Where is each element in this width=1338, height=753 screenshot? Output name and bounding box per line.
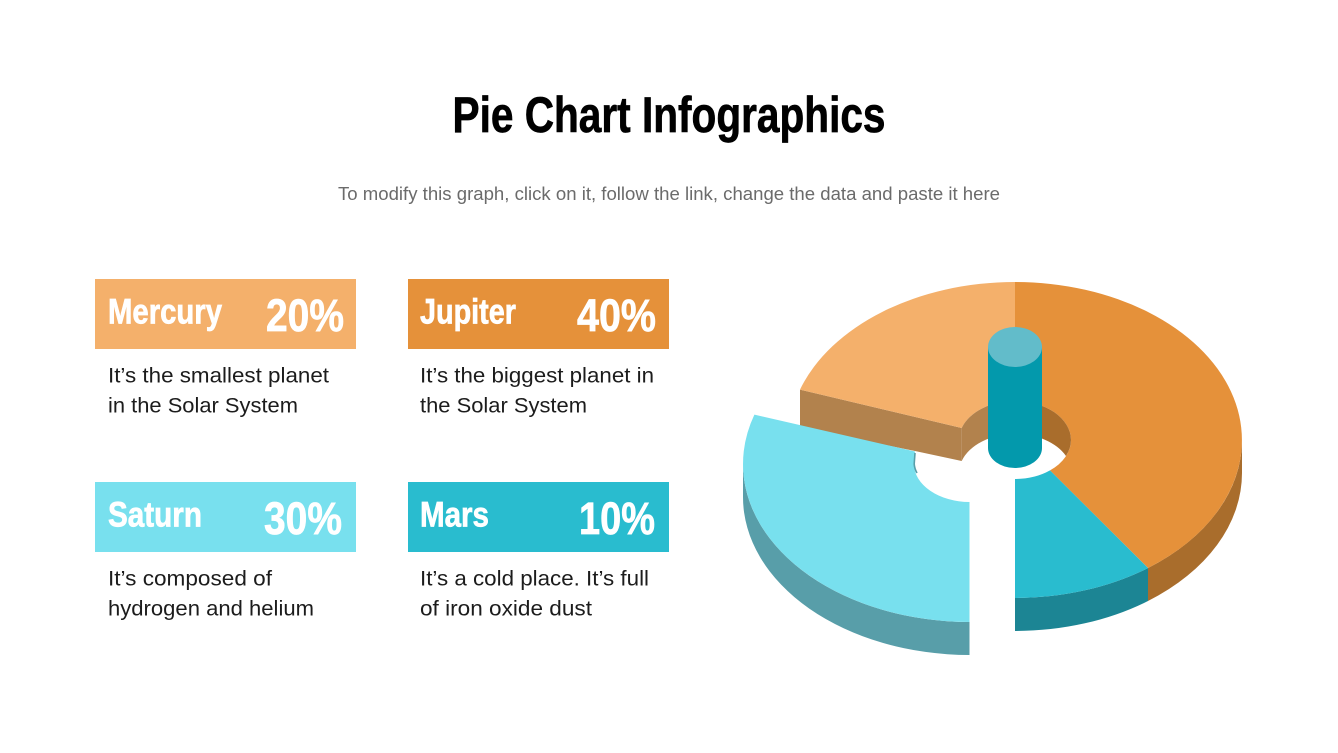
- Jupiter description: the Solar System: [420, 394, 587, 418]
- Jupiter percentage: 40%: [577, 290, 656, 341]
- Mercury description: in the Solar System: [108, 394, 298, 418]
- Mercury description: It’s the smallest planet: [108, 364, 329, 388]
- Saturn slice top: [743, 415, 970, 622]
- cylinder body: [988, 347, 1042, 468]
- Mars name: Mars: [420, 496, 489, 534]
- Jupiter description: [420, 364, 654, 418]
- Mercury percentage: 20%: [266, 290, 344, 341]
- Saturn header bar: [95, 482, 356, 552]
- Mercury name: Mercury: [108, 292, 222, 332]
- centre hole wall, left: [962, 401, 1015, 461]
- panel: Mars: [408, 482, 669, 620]
- Saturn slice side: [743, 464, 970, 655]
- cylinder top: [988, 327, 1042, 367]
- Saturn name: Saturn: [108, 496, 202, 534]
- Jupiter slice side: [1148, 440, 1242, 601]
- Mercury slice top: [800, 282, 1015, 428]
- Mars description: of iron oxide dust: [420, 596, 592, 620]
- Saturn description: It’s composed of: [108, 566, 272, 590]
- panel: Mercury: [95, 279, 356, 418]
- Mercury slice side: [800, 390, 962, 461]
- Mars description: It’s a cold place. It’s full: [420, 566, 649, 590]
- panel: Jupiter: [408, 279, 669, 418]
- Saturn percentage: 30%: [264, 493, 342, 544]
- Jupiter description: It’s the biggest planet in: [420, 364, 654, 388]
- Mars description: [420, 566, 649, 620]
- centre hole wall, right: [1015, 401, 1071, 456]
- Mars header bar: [408, 482, 669, 552]
- Mars slice top: [1015, 470, 1148, 598]
- subtitle: To modify this graph, click on it, follow the link, change the data and paste it here: [338, 183, 1000, 204]
- panel: Saturn: [95, 482, 356, 620]
- title: Pie Chart Infographics: [452, 87, 886, 143]
- Jupiter name: Jupiter: [420, 292, 516, 332]
- Saturn description: hydrogen and helium: [108, 596, 314, 620]
- Mercury header bar: [95, 279, 356, 349]
- Saturn inner sliver: [914, 453, 917, 473]
- Jupiter header bar: [408, 279, 669, 349]
- Jupiter slice top: [1015, 282, 1242, 568]
- Mercury description: [108, 364, 329, 418]
- Mars slice side: [1015, 568, 1148, 631]
- Mars percentage: 10%: [579, 493, 655, 544]
- central cylinder: [988, 327, 1042, 468]
- 3D pie chart: [743, 282, 1242, 655]
- Saturn description: [108, 566, 314, 620]
